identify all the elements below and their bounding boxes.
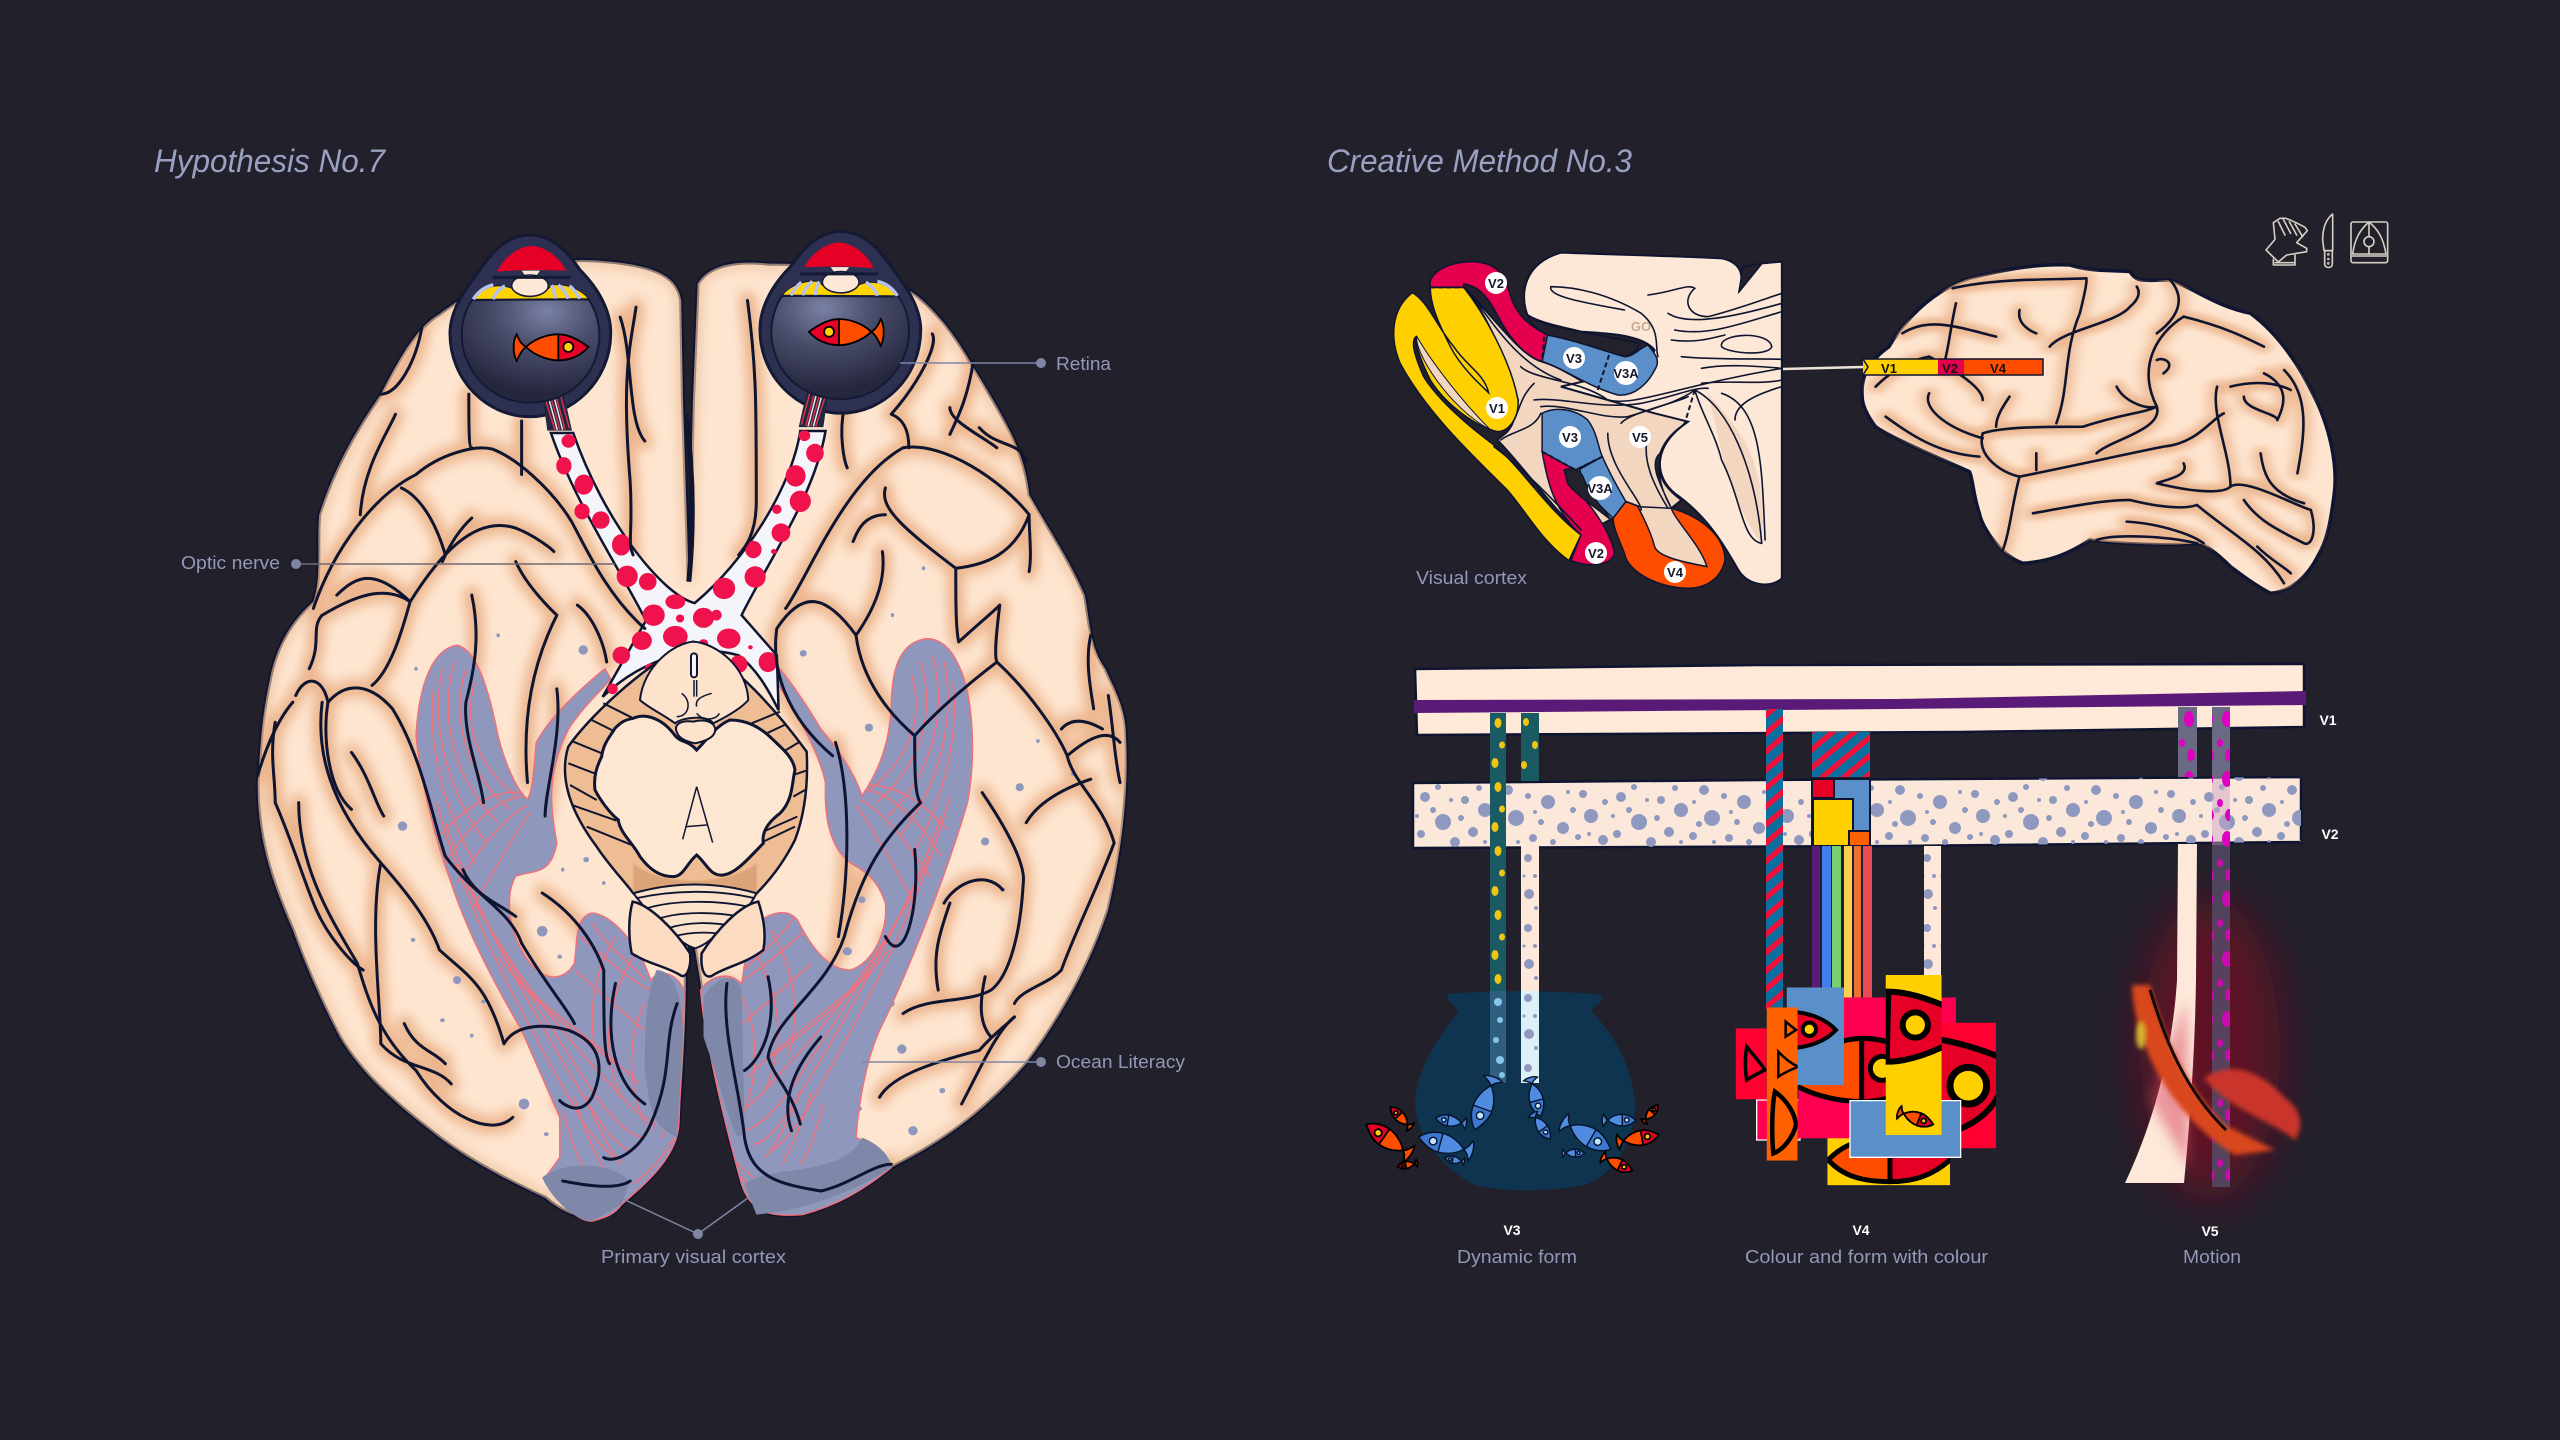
label: Ocean Literacy with leader: Ocean Literacy — [1056, 1052, 1185, 1072]
beige sulcus in V1 — [1417, 337, 1491, 430]
collage: crimson card — [1798, 997, 1956, 1138]
cortex dark gaps — [1527, 263, 1762, 520]
white matter fibres — [1467, 287, 1782, 543]
brain shading — [258, 260, 1127, 1217]
V1 region — [1394, 287, 1581, 561]
panel: visual cortex cross-section — [1394, 253, 1782, 588]
colored strip V1 V2 V4 — [1863, 359, 2043, 376]
caption: V4 Colour and form with colour: Colour and form with colour — [1745, 1247, 1988, 1267]
V5 motion blur artwork — [2125, 707, 2300, 1200]
brain: underside with visual pathway — [258, 231, 1127, 1221]
title: Hypothesis No.7: Hypothesis No.7 — [154, 143, 386, 179]
caption: V4 Colour and form with colour: V4 — [1852, 1222, 1870, 1238]
right eye with fish — [760, 231, 921, 427]
cortex area labels: V3 — [1566, 351, 1582, 366]
collage: orange card — [1766, 1007, 1798, 1161]
V3 magnocellular columns — [1490, 713, 1539, 1083]
V4 region — [1613, 502, 1725, 588]
collage: blue bottom card — [1850, 1101, 1961, 1157]
optic radiation left — [416, 645, 684, 1221]
connector line — [1783, 367, 1863, 369]
cortex area labels: GO — [1631, 319, 1651, 334]
caption: V4 Colour and form with colour — [1745, 1222, 1988, 1267]
label: Optic nerve with leader — [181, 553, 615, 573]
panel: side view of brain — [1783, 265, 2335, 593]
cortex base tissue — [1464, 287, 1688, 535]
label: Retina with leader — [900, 354, 1112, 374]
caption: V3 Dynamic form: Dynamic form — [1457, 1247, 1577, 1267]
icons: gloves, knife, pen nib — [2266, 214, 2388, 267]
V2 regions — [1430, 262, 1547, 362]
lobes beside the stripes — [629, 902, 765, 977]
V2 bar dotted — [1413, 777, 2301, 848]
V4 fish collage — [1736, 975, 2007, 1185]
cortex area labels: V4 — [1667, 565, 1684, 580]
label: Retina with leader: Retina — [1056, 354, 1112, 374]
caption: V3 Dynamic form — [1457, 1222, 1577, 1267]
label: Primary visual cortex with leaders — [601, 1190, 786, 1267]
cortex area labels: V2 — [1588, 546, 1604, 561]
colored strip V1 V2 V4: V4 — [1990, 361, 2007, 376]
caption: V5 Motion — [2183, 1223, 2241, 1267]
collage: yellow card — [1886, 975, 1942, 1135]
caption: V5 Motion: V5 — [2201, 1223, 2219, 1239]
collage: yellow bottom card — [1827, 1138, 1950, 1186]
title: Creative Method No.3: Creative Method No.3 — [1327, 143, 1632, 179]
cortex area labels — [1485, 272, 1686, 583]
colored strip V1 V2 V4: V1 — [1881, 361, 1897, 376]
brainstem and midbrain — [565, 642, 807, 977]
brain speckle dots — [398, 566, 1075, 1136]
V3 fish school — [1361, 1073, 1661, 1176]
collage: blue fish card — [1786, 987, 1844, 1085]
cortex area labels: V5 — [1632, 430, 1648, 445]
label: V2: V2 — [2321, 826, 2339, 842]
cerebral sulci lines — [258, 300, 1120, 1191]
cortex area labels: V1 — [1489, 401, 1505, 416]
V4 columns — [1766, 709, 1941, 1009]
collage: red left card — [1736, 1028, 1767, 1100]
panel: V1 to V5 pathways diagram — [1361, 664, 2306, 1200]
label: Primary visual cortex with leaders: Primary visual cortex — [601, 1247, 786, 1267]
V1 bar — [1414, 664, 2306, 735]
brain silhouette — [258, 260, 1127, 1217]
cortex area labels: V3 — [1562, 430, 1578, 445]
caption: V5 Motion: Motion — [2183, 1247, 2241, 1267]
colored strip V1 V2 V4: V2 — [1942, 361, 1958, 376]
label: Optic nerve with leader: Optic nerve — [181, 553, 280, 573]
V3 and V3A regions — [1542, 335, 1657, 395]
label: Ocean Literacy with leader — [862, 1052, 1185, 1072]
optic radiation right — [701, 639, 972, 1215]
cortex area labels: V3A — [1587, 481, 1613, 496]
cortex area labels: V2 — [1488, 276, 1504, 291]
cortex area labels: V3A — [1613, 366, 1639, 381]
label: V1: V1 — [2319, 712, 2337, 728]
left eye with fish — [450, 235, 611, 431]
V3 jar — [1415, 991, 1635, 1190]
caption: V3 Dynamic form: V3 — [1503, 1222, 1521, 1238]
optic nerve chiasm with dots — [551, 430, 826, 710]
collage: red right card — [1942, 1022, 1996, 1148]
label: Visual cortex: Visual cortex — [1416, 568, 1527, 588]
